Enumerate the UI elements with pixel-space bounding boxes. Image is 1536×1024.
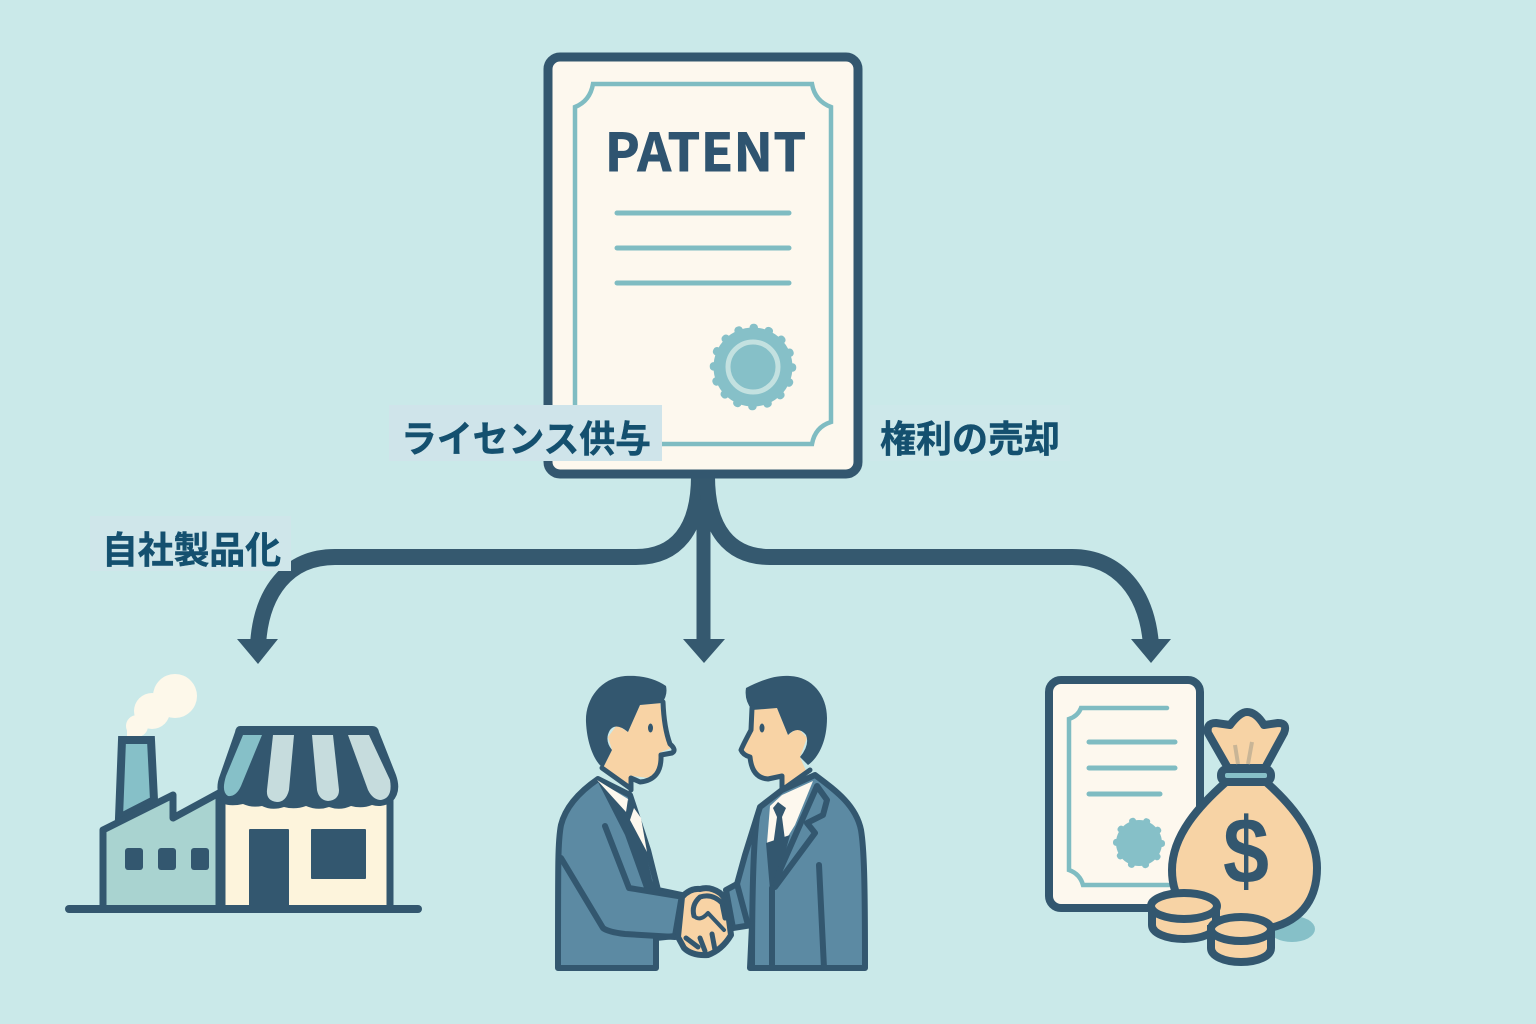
money bag	[1172, 712, 1317, 928]
smoke	[126, 674, 197, 739]
icon: two businessmen shaking hands	[558, 676, 865, 968]
shadow	[1269, 916, 1315, 942]
hair	[586, 676, 666, 768]
lapel	[775, 786, 827, 887]
branching arrows	[237, 476, 1171, 664]
shirt	[767, 781, 813, 862]
chimney	[119, 740, 154, 818]
tie	[773, 802, 786, 846]
vest V	[766, 835, 790, 890]
label: own product: 自社製品化	[102, 530, 281, 571]
suit	[558, 779, 682, 968]
lapel and shirt	[597, 780, 658, 892]
neck and face	[603, 703, 671, 787]
seal	[714, 328, 792, 406]
ground line	[69, 905, 418, 913]
seams	[752, 817, 824, 968]
patent document	[548, 57, 858, 474]
label: sale of rights: 権利の売却	[880, 419, 1060, 460]
neck and face	[743, 708, 807, 788]
awning	[217, 726, 398, 809]
face outline	[741, 708, 782, 790]
icon: certificate with money bag and coins	[1049, 680, 1317, 962]
hair	[746, 676, 827, 765]
dollar sign: $	[1223, 798, 1269, 903]
clasped hands	[678, 888, 731, 955]
small certificate	[1049, 680, 1200, 908]
label: own product	[90, 516, 291, 571]
text lines	[617, 213, 789, 283]
label: license: ライセンス供与	[401, 419, 651, 460]
label: sale of rights	[870, 405, 1070, 461]
certificate border	[575, 84, 831, 444]
icon: factory and shop	[69, 674, 418, 909]
left businessman	[558, 676, 682, 968]
arm lines	[605, 826, 678, 896]
right businessman	[726, 676, 865, 968]
face outline	[631, 702, 674, 790]
PATENT heading: PATENT	[605, 111, 806, 186]
shop building	[222, 795, 390, 909]
coins	[1151, 893, 1271, 962]
suit	[726, 775, 865, 968]
label: license	[389, 405, 662, 461]
factory building	[103, 793, 219, 909]
